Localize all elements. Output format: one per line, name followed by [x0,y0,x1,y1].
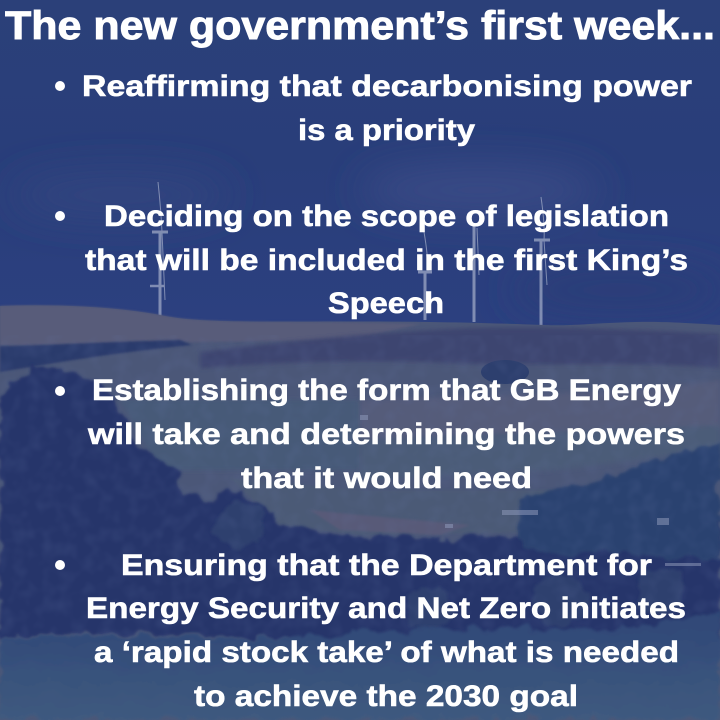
bullet item 1: Reaffirming that decarbonising power [82,70,692,103]
hills [0,305,720,720]
bullet item 4: Energy Security and Net Zero initiates [86,592,686,625]
bullet item 2: that will be included in the first King’s [85,244,688,277]
bullet item 4: to achieve the 2030 goal [194,680,578,713]
bullet item 3: that it would need [241,462,532,495]
mid fields [120,400,360,470]
bullet item 1: is a priority [298,114,475,147]
bullet item 2 [55,200,688,320]
sky [0,0,720,340]
bullet item 2: Deciding on the scope of legislation [104,200,669,233]
farm buildings [360,415,701,566]
tree mass left and lower [0,362,720,640]
foreground grass [0,612,720,720]
bullet item 3 [55,374,685,495]
bullet list [55,70,692,713]
bullet item 4 [55,549,686,713]
bullet item 4: Ensuring that the Department for [121,549,652,582]
hedgerow [0,340,192,372]
bullet item 3: will take and determining the powers [87,418,685,451]
moorland [200,327,720,368]
bullet item 1 [55,70,692,147]
central farm fields [230,478,560,535]
copse [481,360,529,384]
bullet item 4: a ‘rapid stock take’ of what is needed [94,636,679,669]
upper left pasture [0,305,420,346]
title: The new government’s first week... [5,4,715,48]
texture overlay [0,335,720,640]
bullet item 3: Establishing the form that GB Energy [92,374,681,407]
wind turbines [150,182,550,326]
lighter trees [216,501,684,632]
bullet item 2: Speech [328,287,444,320]
tree mass right [520,445,720,560]
